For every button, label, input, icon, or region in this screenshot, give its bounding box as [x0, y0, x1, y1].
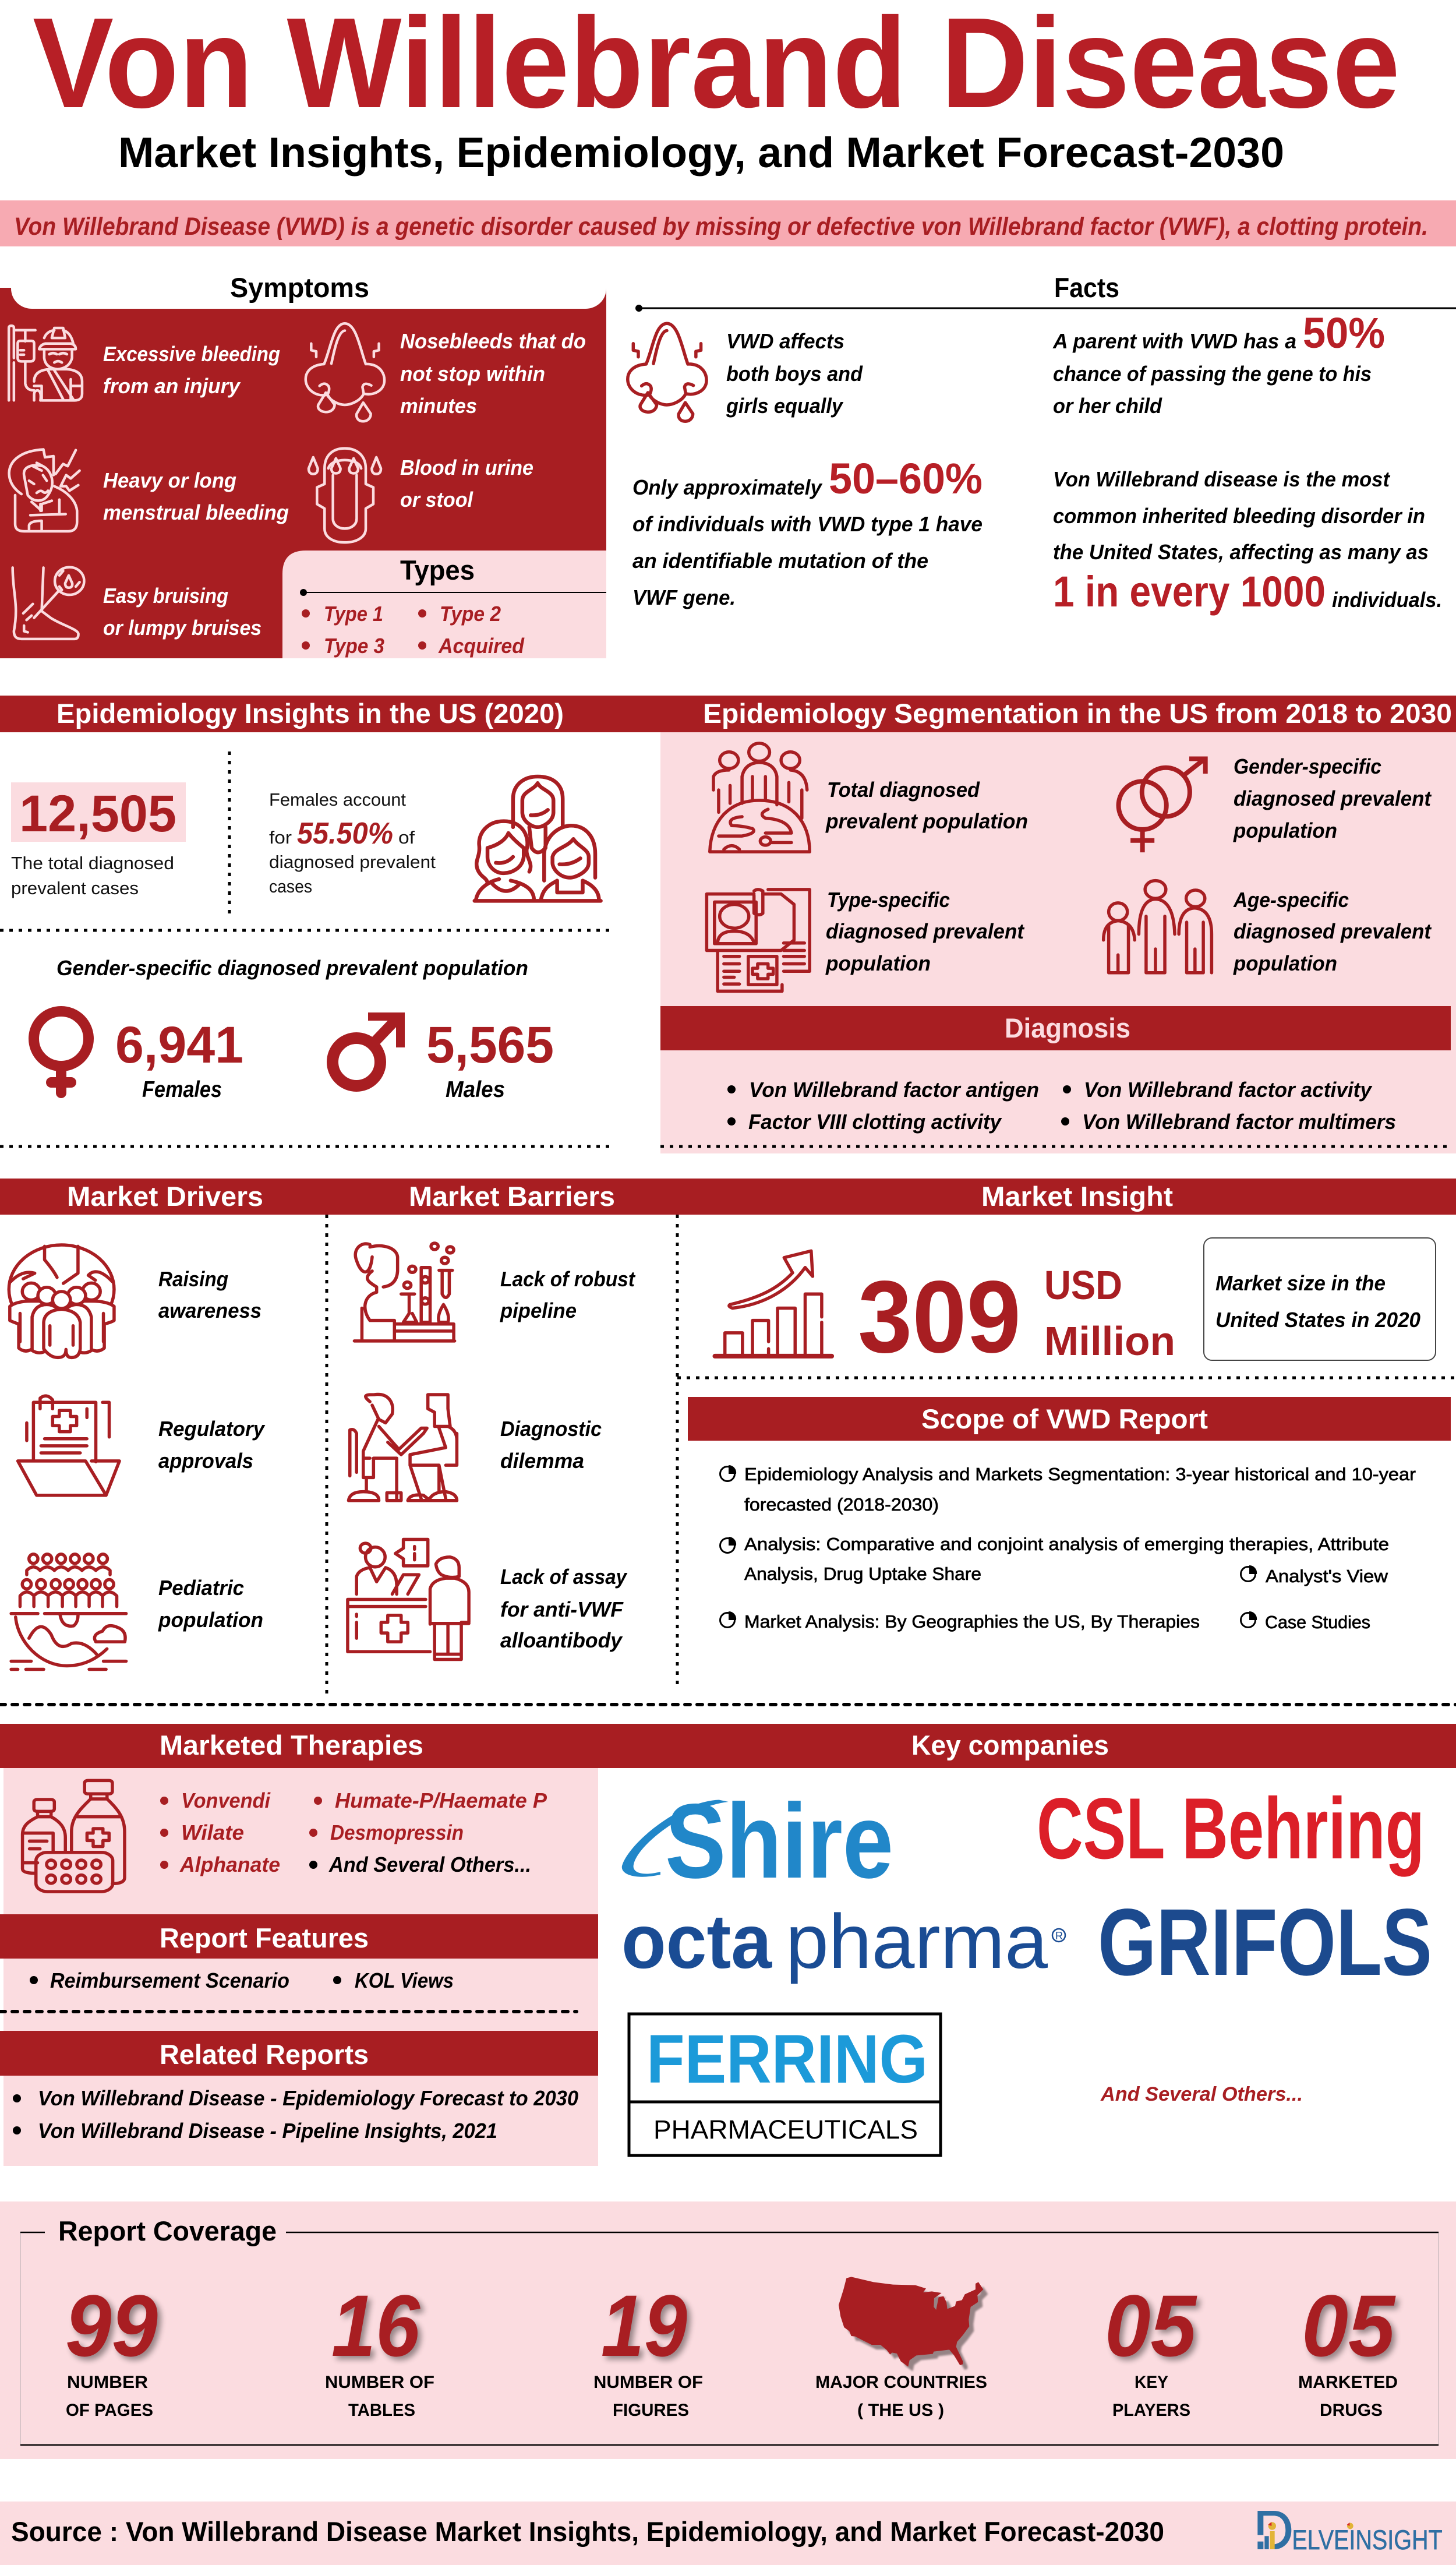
stat: marketed drugs: MARKETED: [1298, 2373, 1398, 2392]
logo: octapharma: octa: [621, 1899, 773, 1984]
text: age-specific: Age-specific: [1233, 888, 1349, 912]
heading: symptoms: Symptoms: [230, 272, 369, 303]
text: gender-specific: diagnosed prevalent: [1234, 786, 1432, 810]
panel: therapies, features and reports: [0, 1768, 598, 2166]
stat: key players: [1105, 2277, 1201, 2420]
list: marketed therapies: And Several Others...: [328, 1853, 531, 1876]
rule with dot: [635, 305, 1456, 312]
text: type-specific: population: [825, 951, 931, 975]
text: gender-specific: Gender-specific: [1234, 754, 1381, 778]
list: types: Type 1: [324, 602, 383, 626]
text: pediatric population: [158, 1576, 263, 1632]
fact: identifiable mutation: 50–60%: [829, 454, 983, 503]
stat: figures: 19: [601, 2277, 687, 2375]
scope item: analysis: Analysis: Comparative and conjoint analysis of emerging therapies, Attribute: [744, 1534, 1389, 1554]
list: diagnosis: Von Willebrand factor antigen: [749, 1078, 1039, 1102]
stat: females share: of: [398, 827, 415, 848]
stat: key players: KEY: [1135, 2373, 1168, 2392]
list: types: Type 2: [440, 602, 501, 626]
text: easy bruising: [103, 584, 261, 640]
icon: nose bleed: [628, 323, 706, 421]
text: gender-specific: population: [1233, 818, 1337, 842]
icon: nose bleed: [306, 323, 384, 421]
section header: epidemiology: Epidemiology Insights in the US (2020): [56, 698, 564, 729]
fact: most common disorder: common inherited bleeding disorder in: [1053, 504, 1425, 528]
subtitle: Market Insights, Epidemiology, and Market Forecast-2030: [118, 129, 1284, 177]
report features header: [0, 1914, 598, 1959]
icon: lab researcher: [354, 1243, 455, 1341]
footer: [0, 2502, 1456, 2565]
stat: males: Males: [446, 1077, 505, 1102]
panel: types: [282, 551, 606, 658]
text: excessive bleeding: [103, 342, 280, 398]
fact: most common disorder: the United States, affecting as many as: [1053, 540, 1429, 564]
stat: market size: 309: [858, 1260, 1021, 1374]
heading: report coverage: Report Coverage: [58, 2215, 277, 2246]
list: types: [302, 602, 525, 658]
text: lack of assay: alloantibody: [500, 1628, 623, 1652]
logo: octapharma: [621, 1899, 1065, 1984]
scope item: market analysis: Market Analysis: By Geographies the US, By Therapies: [744, 1611, 1200, 1632]
text: pediatric population: population: [158, 1608, 263, 1632]
panel: market drivers: [9, 1245, 266, 1670]
list: related reports: Von Willebrand Disease - Pipeline Insights, 2021: [38, 2119, 497, 2143]
stat: pages: OF PAGES: [66, 2401, 153, 2420]
source line: Source : Von Willebrand Disease Market Insights, Epidemiology, and Market Forecast-2030: [11, 2516, 1164, 2547]
stat: total cases: prevalent cases: [11, 878, 139, 898]
icon: globe with crowd: [9, 1245, 114, 1357]
text: lack of pipeline: [500, 1267, 636, 1322]
scope item: analyst view: Analyst's View: [1266, 1566, 1388, 1586]
list: diagnosis: Von Willebrand factor multimers: [1082, 1110, 1396, 1134]
stat: key players: 05: [1105, 2277, 1197, 2375]
scope header: Scope of VWD Report: [921, 1403, 1208, 1434]
icon: family of three ages: [1104, 881, 1211, 973]
list: marketed therapies: Humate-P/Haemate P: [335, 1788, 547, 1812]
fact: boys and girls: [726, 329, 863, 418]
list: marketed therapies: Vonvendi: [181, 1788, 271, 1812]
text: regulatory approvals: approvals: [158, 1449, 253, 1473]
stat: females share: for: [269, 827, 292, 848]
text: pediatric population: Pediatric: [158, 1576, 244, 1600]
stat: market size: Million: [1044, 1318, 1175, 1364]
list: marketed therapies: Wilate: [181, 1820, 244, 1844]
text: easy bruising: Easy bruising: [103, 584, 228, 608]
section header: therapies and companies: Marketed Therapies: [160, 1730, 423, 1760]
callout: market size note: United States in 2020: [1215, 1308, 1420, 1332]
stat: males: [426, 1015, 554, 1102]
text: menstrual bleeding: Heavy or long: [103, 468, 236, 492]
icon: female symbol: [34, 1011, 89, 1093]
text: nosebleeds: minutes: [400, 394, 477, 418]
icon: gender symbols: [1119, 758, 1206, 852]
panel: key companies: [621, 1780, 1432, 2155]
text: type-specific: [825, 888, 1025, 975]
scope item: analysis: Analysis, Drug Uptake Share: [744, 1564, 981, 1584]
scope item: epidemiology: forecasted (2018-2030): [744, 1494, 939, 1515]
scope item: case studies: Case Studies: [1265, 1612, 1370, 1632]
stat: total cases: The total diagnosed: [11, 853, 174, 873]
text: type-specific: diagnosed prevalent: [826, 919, 1025, 943]
fact: 50 percent: or her child: [1053, 394, 1162, 418]
fact: 50 percent: chance of passing the gene to his: [1053, 362, 1372, 386]
text: regulatory approvals: Regulatory: [158, 1417, 266, 1441]
stat: females: [115, 1015, 243, 1102]
text: nosebleeds: [400, 329, 586, 418]
text: total diagnosed: Total diagnosed: [827, 778, 980, 802]
section header: market: Market Barriers: [409, 1181, 615, 1212]
stat: figures: [593, 2277, 703, 2420]
fact: 50 percent: 50%: [1303, 309, 1385, 357]
label: major countries: ( THE US ): [857, 2401, 944, 2420]
icon: medicine bottles: [23, 1780, 125, 1892]
stat: females: Females: [142, 1077, 222, 1102]
stat: pages: [65, 2277, 161, 2420]
text: lack of assay: [500, 1565, 628, 1652]
stat: tables: TABLES: [348, 2401, 415, 2420]
text: regulatory approvals: [158, 1417, 266, 1473]
fact: boys and girls: girls equally: [726, 394, 844, 418]
panel: symptoms: [0, 272, 606, 658]
text: age-specific: diagnosed prevalent: [1234, 919, 1432, 943]
icon: sanitary pad: [309, 449, 381, 542]
callout: market size note: [1204, 1238, 1436, 1360]
stat: figures: FIGURES: [613, 2401, 689, 2420]
related reports header: Related Reports: [160, 2039, 369, 2070]
scope item: epidemiology: Epidemiology Analysis and Markets Segmentation: 3-year historical and 10-year: [744, 1464, 1416, 1484]
section header: market: [0, 1179, 1456, 1215]
text: nosebleeds: Nosebleeds that do: [400, 329, 586, 353]
heading: types: Types: [400, 555, 475, 585]
list: diagnosis: Von Willebrand factor activity: [1084, 1078, 1373, 1102]
coverage frame: [20, 2230, 1439, 2445]
text: type-specific: Type-specific: [827, 888, 950, 912]
definition banner: [0, 200, 1456, 246]
text: and several others: And Several Others...: [1100, 2083, 1303, 2105]
stat: females share: [269, 789, 436, 897]
text: gender-specific: [1233, 754, 1432, 842]
logo: Ferring: PHARMACEUTICALS: [653, 2115, 918, 2144]
list: types: Type 3: [324, 634, 384, 658]
text: age-specific: population: [1233, 951, 1337, 975]
logo: Shire: Shire: [665, 1781, 893, 1900]
text: lack of assay: Lack of assay: [500, 1565, 628, 1589]
icon: children on globe: [11, 1554, 126, 1670]
label: major countries: [815, 2373, 987, 2420]
icon: medical documents: [706, 890, 810, 991]
text: easy bruising: or lumpy bruises: [103, 616, 261, 640]
text: blood in urine: [400, 456, 533, 511]
list: report features: KOL Views: [355, 1968, 454, 1992]
scope item: epidemiology: [720, 1464, 1416, 1515]
list: diagnosis: [727, 1078, 1396, 1134]
stat: pages: 99: [65, 2277, 158, 2375]
heading: facts: Facts: [1054, 272, 1119, 303]
text: diagnostic dilemma: [500, 1417, 602, 1473]
list: marketed therapies: Desmopressin: [330, 1820, 464, 1844]
stat: tables: NUMBER OF: [325, 2373, 434, 2392]
panel: epidemiology insights: [0, 751, 614, 1146]
text: diagnostic dilemma: Diagnostic: [500, 1417, 602, 1441]
panel: market insight: [677, 1238, 1456, 1632]
section header: therapies and companies: [0, 1724, 1456, 1768]
icon: injured worker: [9, 326, 82, 400]
list: report features: [30, 1968, 454, 1992]
text: excessive bleeding: from an injury: [103, 374, 241, 398]
icon: three women: [475, 777, 601, 901]
icon: male symbol: [333, 1012, 405, 1086]
section header: market: Market Insight: [981, 1181, 1173, 1212]
text: menstrual bleeding: menstrual bleeding: [103, 500, 289, 524]
stat: marketed drugs: 05: [1302, 2277, 1396, 2375]
stat: females share: diagnosed prevalent: [269, 852, 436, 872]
stat: key players: 05: [1108, 2280, 1201, 2378]
stat: marketed drugs: DRUGS: [1320, 2401, 1383, 2420]
fact: 50 percent: [1052, 309, 1385, 418]
rule with dot: [300, 589, 606, 596]
text: lack of pipeline: pipeline: [500, 1299, 577, 1322]
section header: therapies and companies: Key companies: [911, 1730, 1109, 1760]
stat: pages: NUMBER: [67, 2373, 148, 2392]
stat: total cases: [11, 782, 186, 898]
text: blood in urine: Blood in urine: [400, 456, 533, 479]
stat: figures: NUMBER OF: [593, 2373, 703, 2392]
list: types: Acquired: [438, 634, 525, 658]
stat: females share: Females account: [269, 789, 406, 810]
fact: most common disorder: [1053, 467, 1442, 616]
icon: doctor and patient: [348, 1395, 457, 1501]
stat: females share: 55.50%: [297, 817, 393, 851]
icon: growth chart: [715, 1251, 832, 1356]
fact: boys and girls: both boys and: [726, 362, 863, 386]
list: report features: Reimbursement Scenario: [50, 1968, 289, 1992]
icon: US map: [839, 2277, 988, 2372]
label: major countries: MAJOR COUNTRIES: [815, 2373, 987, 2392]
stat: pages: 99: [69, 2280, 161, 2378]
fact: most common disorder: 1 in every 1000: [1053, 567, 1326, 616]
stat: tables: 16: [335, 2280, 424, 2378]
logo: Ferring: FERRING: [646, 2021, 928, 2098]
fact: identifiable mutation: an identifiable mutation of the: [632, 549, 928, 573]
icon: folder with documents: [18, 1396, 119, 1495]
text: nosebleeds: not stop within: [400, 362, 545, 386]
stat: figures: 19: [605, 2280, 691, 2378]
section header: epidemiology: [0, 696, 1456, 732]
list: related reports: Von Willebrand Disease - Epidemiology Forecast to 2030: [38, 2086, 578, 2110]
list: diagnosis: Factor VIII clotting activity: [748, 1110, 1002, 1134]
text: excessive bleeding: Excessive bleeding: [103, 342, 280, 366]
section header: market: Market Drivers: [67, 1181, 263, 1212]
text: raising awareness: awareness: [158, 1299, 261, 1322]
related reports header: [0, 2031, 598, 2076]
panel: epidemiology segmentation: [660, 732, 1456, 1153]
list: marketed therapies: [160, 1788, 547, 1876]
list: marketed therapies: Alphanate: [179, 1853, 280, 1876]
scope header: [688, 1397, 1451, 1441]
stat: females: 6,941: [115, 1015, 243, 1074]
icon: reception desk: [348, 1539, 469, 1660]
stat: total cases: 12,505: [19, 784, 176, 842]
stat: marketed drugs: [1298, 2277, 1400, 2420]
text: lack of pipeline: Lack of robust: [500, 1267, 636, 1291]
heading: gender-specific: Gender-specific diagnosed prevalent population: [56, 956, 528, 980]
list: scope of report: [720, 1464, 1416, 1632]
stat: males: 5,565: [426, 1015, 554, 1074]
text: blood in urine: or stool: [400, 488, 473, 511]
section header: epidemiology: Epidemiology Segmentation in the US from 2018 to 2030: [703, 698, 1452, 729]
panel: market barriers: [348, 1243, 636, 1660]
stat: tables: [325, 2277, 434, 2420]
icon: globe with people: [710, 743, 810, 852]
panel: facts: [628, 272, 1456, 616]
text: menstrual bleeding: [103, 468, 289, 524]
list: related reports: [13, 2086, 578, 2143]
logo: DelveInsight: [1257, 2511, 1443, 2555]
report features header: Report Features: [160, 1922, 369, 1953]
logo: Ferring: [629, 2014, 941, 2155]
text: raising awareness: [158, 1267, 261, 1322]
icon: bruised leg: [13, 567, 84, 639]
stat: market size: [858, 1260, 1175, 1374]
text: age-specific: [1233, 888, 1432, 975]
stat: key players: PLAYERS: [1112, 2401, 1190, 2420]
fact: 50 percent: A parent with VWD has a: [1052, 329, 1296, 353]
logo: octapharma: pharma: [786, 1899, 1048, 1984]
fact: most common disorder: Von Willebrand disease is the most: [1053, 467, 1391, 491]
fact: most common disorder: individuals.: [1332, 588, 1442, 612]
fact: boys and girls: VWD affects: [726, 329, 844, 353]
diagnosis header: [660, 1006, 1451, 1050]
icon: woman in pain: [9, 450, 80, 531]
fact: identifiable mutation: VWF gene.: [632, 585, 736, 609]
fact: identifiable mutation: of individuals with VWD type 1 have: [632, 512, 983, 536]
stat: market size: USD: [1044, 1262, 1122, 1308]
text: total diagnosed: prevalent population: [825, 809, 1028, 833]
text: lack of assay: for anti-VWF: [500, 1597, 624, 1621]
stat: tables: 16: [331, 2277, 420, 2375]
text: diagnostic dilemma: dilemma: [500, 1449, 584, 1473]
panel: report coverage: [0, 2201, 1456, 2459]
text: total diagnosed: [825, 778, 1028, 833]
stat: females share: cases: [269, 876, 312, 897]
fact: identifiable mutation: [632, 454, 983, 609]
stat: marketed drugs: 05: [1305, 2280, 1400, 2378]
scope item: analysis: [720, 1534, 1389, 1584]
text: raising awareness: Raising: [158, 1267, 228, 1291]
fact: identifiable mutation: Only approximately: [632, 475, 823, 499]
logo: octapharma: R: [1055, 1930, 1063, 1942]
diagnosis header: Diagnosis: [1005, 1012, 1130, 1043]
callout: market size note: Market size in the: [1215, 1271, 1386, 1295]
